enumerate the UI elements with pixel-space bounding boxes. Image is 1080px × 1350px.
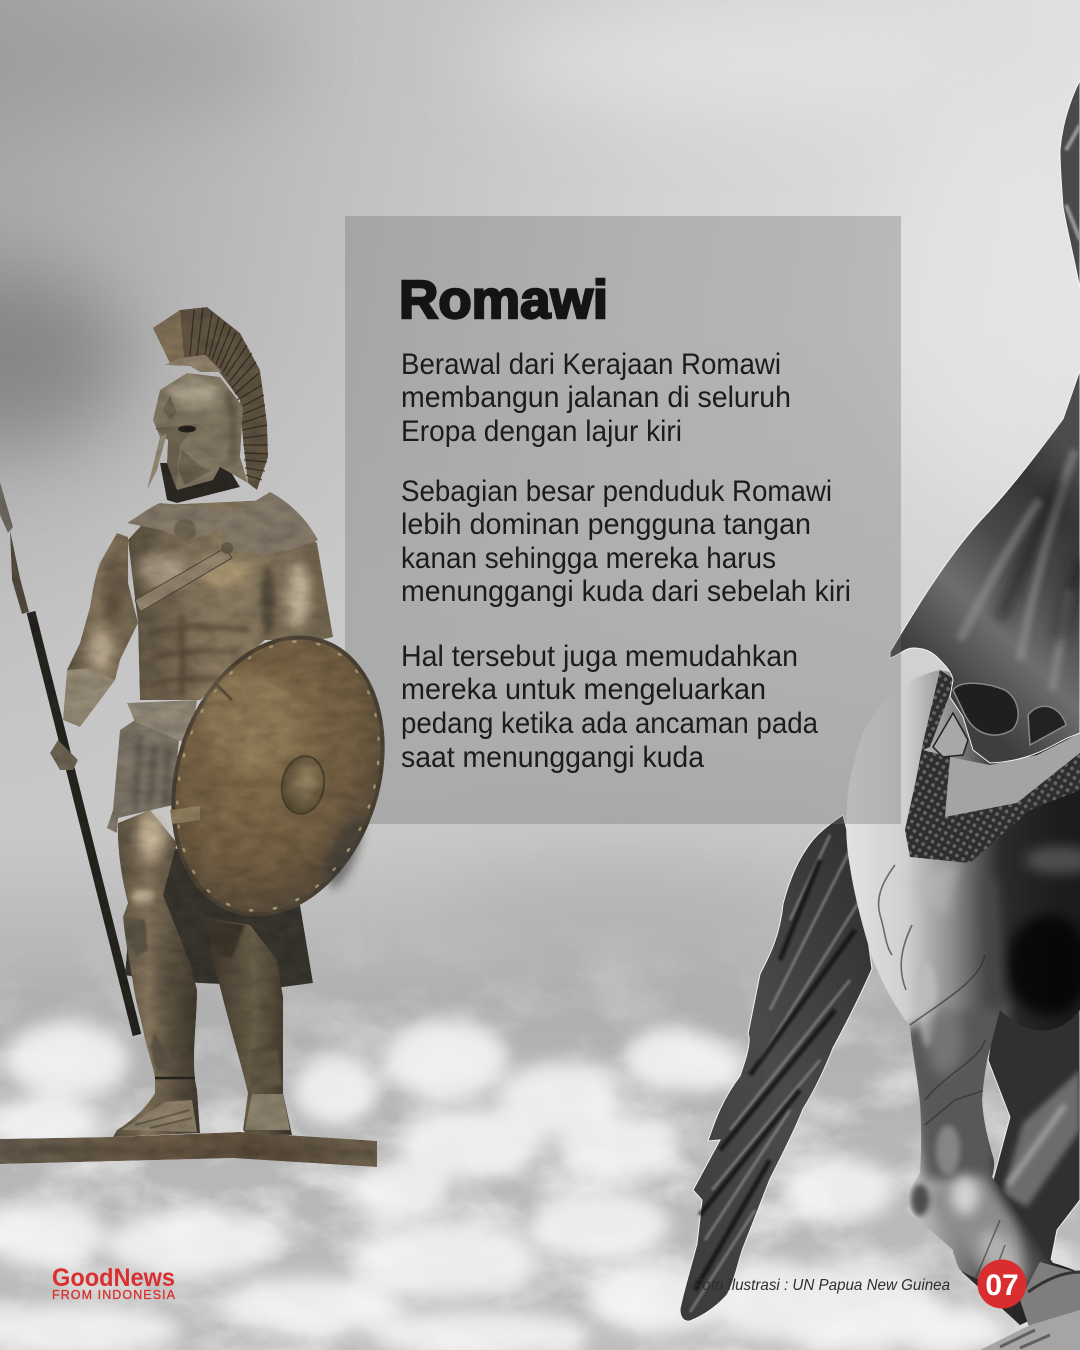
paragraph 2 <box>401 475 851 608</box>
paragraph 2: menunggangi kuda dari sebelah kiri <box>401 575 851 608</box>
round shield <box>139 610 417 942</box>
logo: GoodNews from Indonesia: FROM INDONESIA <box>52 1288 176 1302</box>
logo: GoodNews from Indonesia: GoodNews <box>52 1264 175 1292</box>
paragraph 2: lebih dominan pengguna tangan <box>401 508 811 541</box>
helmet <box>147 373 248 490</box>
paragraph 3: mereka untuk mengeluarkan <box>401 673 766 706</box>
helmet crest <box>153 307 268 490</box>
wrist guard and hand <box>50 668 115 770</box>
statue: rider figure at top right <box>1060 80 1080 289</box>
page number badge <box>978 1260 1026 1308</box>
pale cloth fold <box>933 713 968 757</box>
photo credit: Foto Ilustrasi : UN Papua New Guinea <box>693 1277 950 1294</box>
paragraph 3: Hal tersebut juga memudahkan <box>401 640 798 673</box>
heading: Romawi: Romawi <box>399 270 608 330</box>
paragraph 3 <box>401 640 818 774</box>
paragraph 1: Berawal dari Kerajaan Romawi <box>401 348 781 381</box>
right leg <box>207 917 292 1135</box>
left leg <box>113 810 200 1137</box>
paragraph 3: pedang ketika ada ancaman pada <box>401 707 818 740</box>
loincloth and skirt <box>107 700 197 833</box>
paragraph 2: kanan sehingga mereka harus <box>401 542 776 575</box>
paragraph 1 <box>401 348 791 448</box>
base plank <box>0 1132 377 1167</box>
hoof shadow wedge <box>953 1252 1040 1325</box>
statue: bronze Roman soldier <box>0 307 417 1167</box>
paragraph 3: saat menunggangi kuda <box>401 741 704 774</box>
shoulder cape <box>127 492 318 556</box>
horse tail <box>680 815 872 1321</box>
spear <box>0 482 137 1035</box>
hind leg <box>988 980 1080 1265</box>
statue: horse and rider at right <box>680 370 1080 1350</box>
page number badge: 07 <box>985 1269 1019 1302</box>
paragraph 1: Eropa dengan lajur kiri <box>401 415 682 448</box>
horse body and front leg <box>846 670 1080 1325</box>
cloud puffs <box>0 1020 1080 1350</box>
saddle cloth fringe <box>905 670 1080 863</box>
dark cloth behind the legs <box>125 847 313 987</box>
rider cape <box>890 370 1080 763</box>
torso <box>89 500 333 700</box>
translucent text panel <box>345 216 901 824</box>
neck and beard <box>160 462 240 503</box>
ankle collar and rock at the bottom right <box>980 1262 1080 1350</box>
paragraph 2: Sebagian besar penduduk Romawi <box>401 475 832 508</box>
pale saddle cloth <box>945 733 1080 817</box>
left arm <box>67 533 138 680</box>
paragraph 1: membangun jalanan di seluruh <box>401 381 791 414</box>
